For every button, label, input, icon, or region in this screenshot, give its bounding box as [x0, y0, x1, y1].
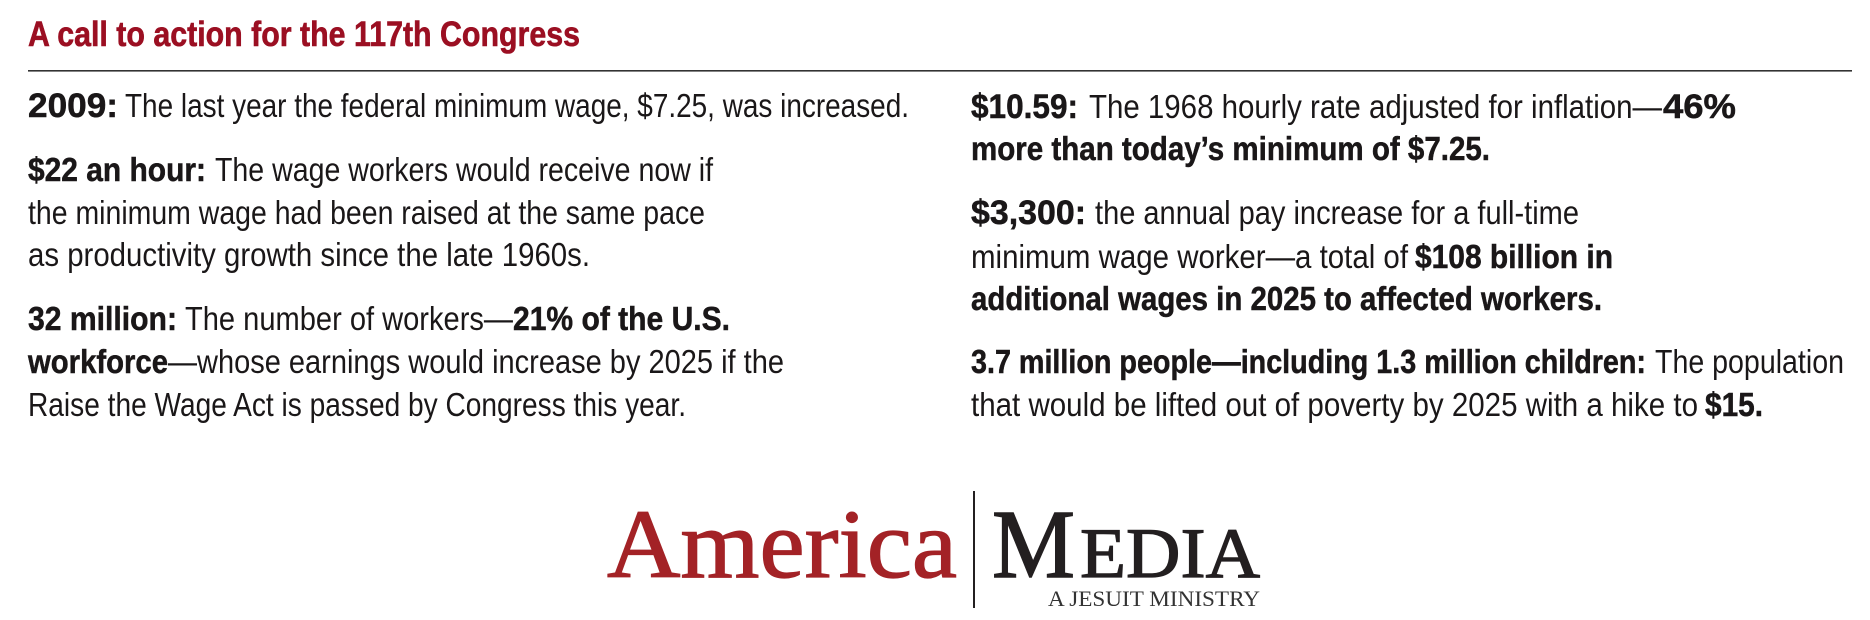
fact: 32 million: 21% of the U.S.: [513, 300, 730, 337]
fact: $22 an hour: as productivity growth since the late 1960s.: [28, 236, 590, 273]
fact: 2009: The last year the federal minimum wage, $7.25, was increased.: [125, 87, 909, 124]
fact: $3,300: $3,300:: [971, 194, 1086, 232]
fact: $10.59: 46%: [1663, 88, 1736, 126]
fact: $10.59: [971, 88, 1736, 167]
logo wordmark: Media: M: [992, 491, 1075, 598]
fact: $22 an hour: [28, 151, 714, 273]
logo tagline: A JESUIT MINISTRY: [1048, 586, 1260, 611]
fact: $10.59: The 1968 hourly rate adjusted for inflation—: [1089, 88, 1662, 125]
fact: $3,300: the annual pay increase for a full-time: [1095, 194, 1579, 231]
fact: 3.7 million people: 3.7 million people—including 1.3 million children:: [971, 343, 1646, 380]
fact: $3,300: $108 billion in: [1415, 238, 1613, 275]
fact: 32 million: Raise the Wage Act is passed by Congress this year.: [28, 386, 686, 423]
logo wordmark: Media: EDIA: [1080, 515, 1260, 593]
fact: $22 an hour: The wage workers would receive now if: [215, 151, 714, 188]
fact: 32 million: workforce: [27, 343, 168, 380]
fact: $10.59: more than today’s minimum of $7.25.: [971, 130, 1490, 167]
fact: 32 million: The number of workers—: [185, 300, 513, 337]
logo: America Media: [607, 491, 1260, 611]
fact: 32 million: 32 million:: [28, 300, 177, 337]
fact: 3.7 million people: The population: [1655, 343, 1844, 380]
fact: $3,300: additional wages in 2025 to affected workers.: [971, 280, 1602, 317]
panel: right column facts: [971, 88, 1844, 423]
fact: $3,300: minimum wage worker—a total of: [971, 238, 1409, 275]
logo wordmark: America: America: [607, 491, 957, 598]
fact: 3.7 million people: that would be lifted out of poverty by 2025 with a hike to: [971, 386, 1698, 423]
fact: 3.7 million people: [971, 343, 1844, 423]
fact: $22 an hour: the minimum wage had been raised at the same pace: [28, 194, 705, 231]
fact: 2009: 2009:: [28, 87, 118, 125]
fact: 32 million: [27, 300, 784, 423]
panel: left column facts: [27, 87, 909, 423]
fact: 3.7 million people: $15.: [1705, 386, 1763, 423]
fact: $10.59: $10.59:: [971, 88, 1078, 126]
fact: $22 an hour: $22 an hour:: [28, 151, 206, 188]
logo wordmark: Media: [992, 491, 1260, 598]
fact: 32 million: —whose earnings would increase by 2025 if the: [168, 343, 784, 380]
fact: $3,300: [971, 194, 1613, 317]
title: A call to action for the 117th Congress: [28, 15, 580, 54]
